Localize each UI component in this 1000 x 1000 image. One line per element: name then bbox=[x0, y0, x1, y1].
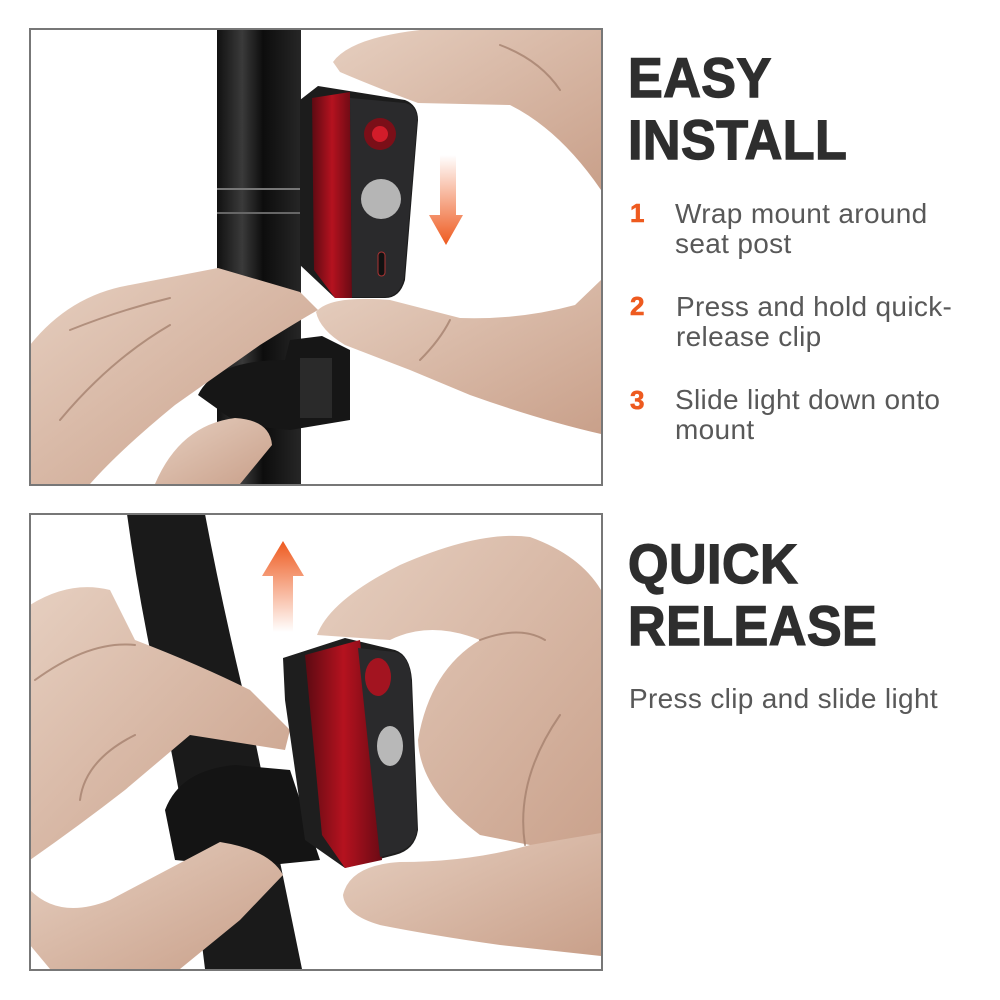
step number 2: 2 bbox=[630, 291, 644, 321]
bottom right hand bbox=[316, 280, 601, 434]
panel border: easy install bbox=[29, 28, 603, 486]
heading: easy install: EASY bbox=[628, 46, 772, 109]
step text 3: mount bbox=[675, 414, 754, 445]
tail light bbox=[300, 86, 418, 298]
thumb bbox=[155, 418, 272, 484]
step text 2: Press and hold quick- bbox=[676, 291, 952, 322]
step text 2 bbox=[676, 291, 952, 352]
mount bbox=[165, 765, 320, 865]
heading: quick release: RELEASE bbox=[628, 594, 877, 657]
left hand bbox=[30, 587, 290, 860]
arrow: up bbox=[262, 541, 304, 632]
step text 3 bbox=[675, 384, 940, 445]
panel: easy install photo bbox=[31, 30, 601, 484]
heading: quick release bbox=[628, 532, 877, 657]
step text 3: Slide light down onto bbox=[675, 384, 940, 415]
step text 1 bbox=[675, 198, 928, 259]
bottom right hand bbox=[343, 833, 601, 956]
panel: quick release photo bbox=[31, 515, 601, 969]
step number 3: 3 bbox=[630, 385, 644, 415]
arrow: down bbox=[429, 155, 463, 245]
heading: easy install: INSTALL bbox=[628, 108, 847, 171]
panel border: quick release bbox=[29, 513, 603, 971]
step text 1: seat post bbox=[675, 228, 792, 259]
lower thumb bbox=[30, 842, 283, 969]
left hand bbox=[30, 268, 318, 484]
mount clip bbox=[198, 336, 350, 430]
top right hand bbox=[317, 536, 601, 880]
step text 2: release clip bbox=[676, 321, 822, 352]
step number 1: 1 bbox=[630, 198, 644, 228]
top right hand bbox=[333, 29, 601, 190]
quick release text: Press clip and slide light bbox=[629, 683, 938, 714]
curved seat post bbox=[127, 514, 302, 969]
heading: easy install bbox=[628, 46, 847, 171]
tail light bbox=[283, 638, 418, 868]
step text 1: Wrap mount around bbox=[675, 198, 928, 229]
heading: quick release: QUICK bbox=[628, 532, 798, 595]
seat post bbox=[217, 29, 301, 484]
